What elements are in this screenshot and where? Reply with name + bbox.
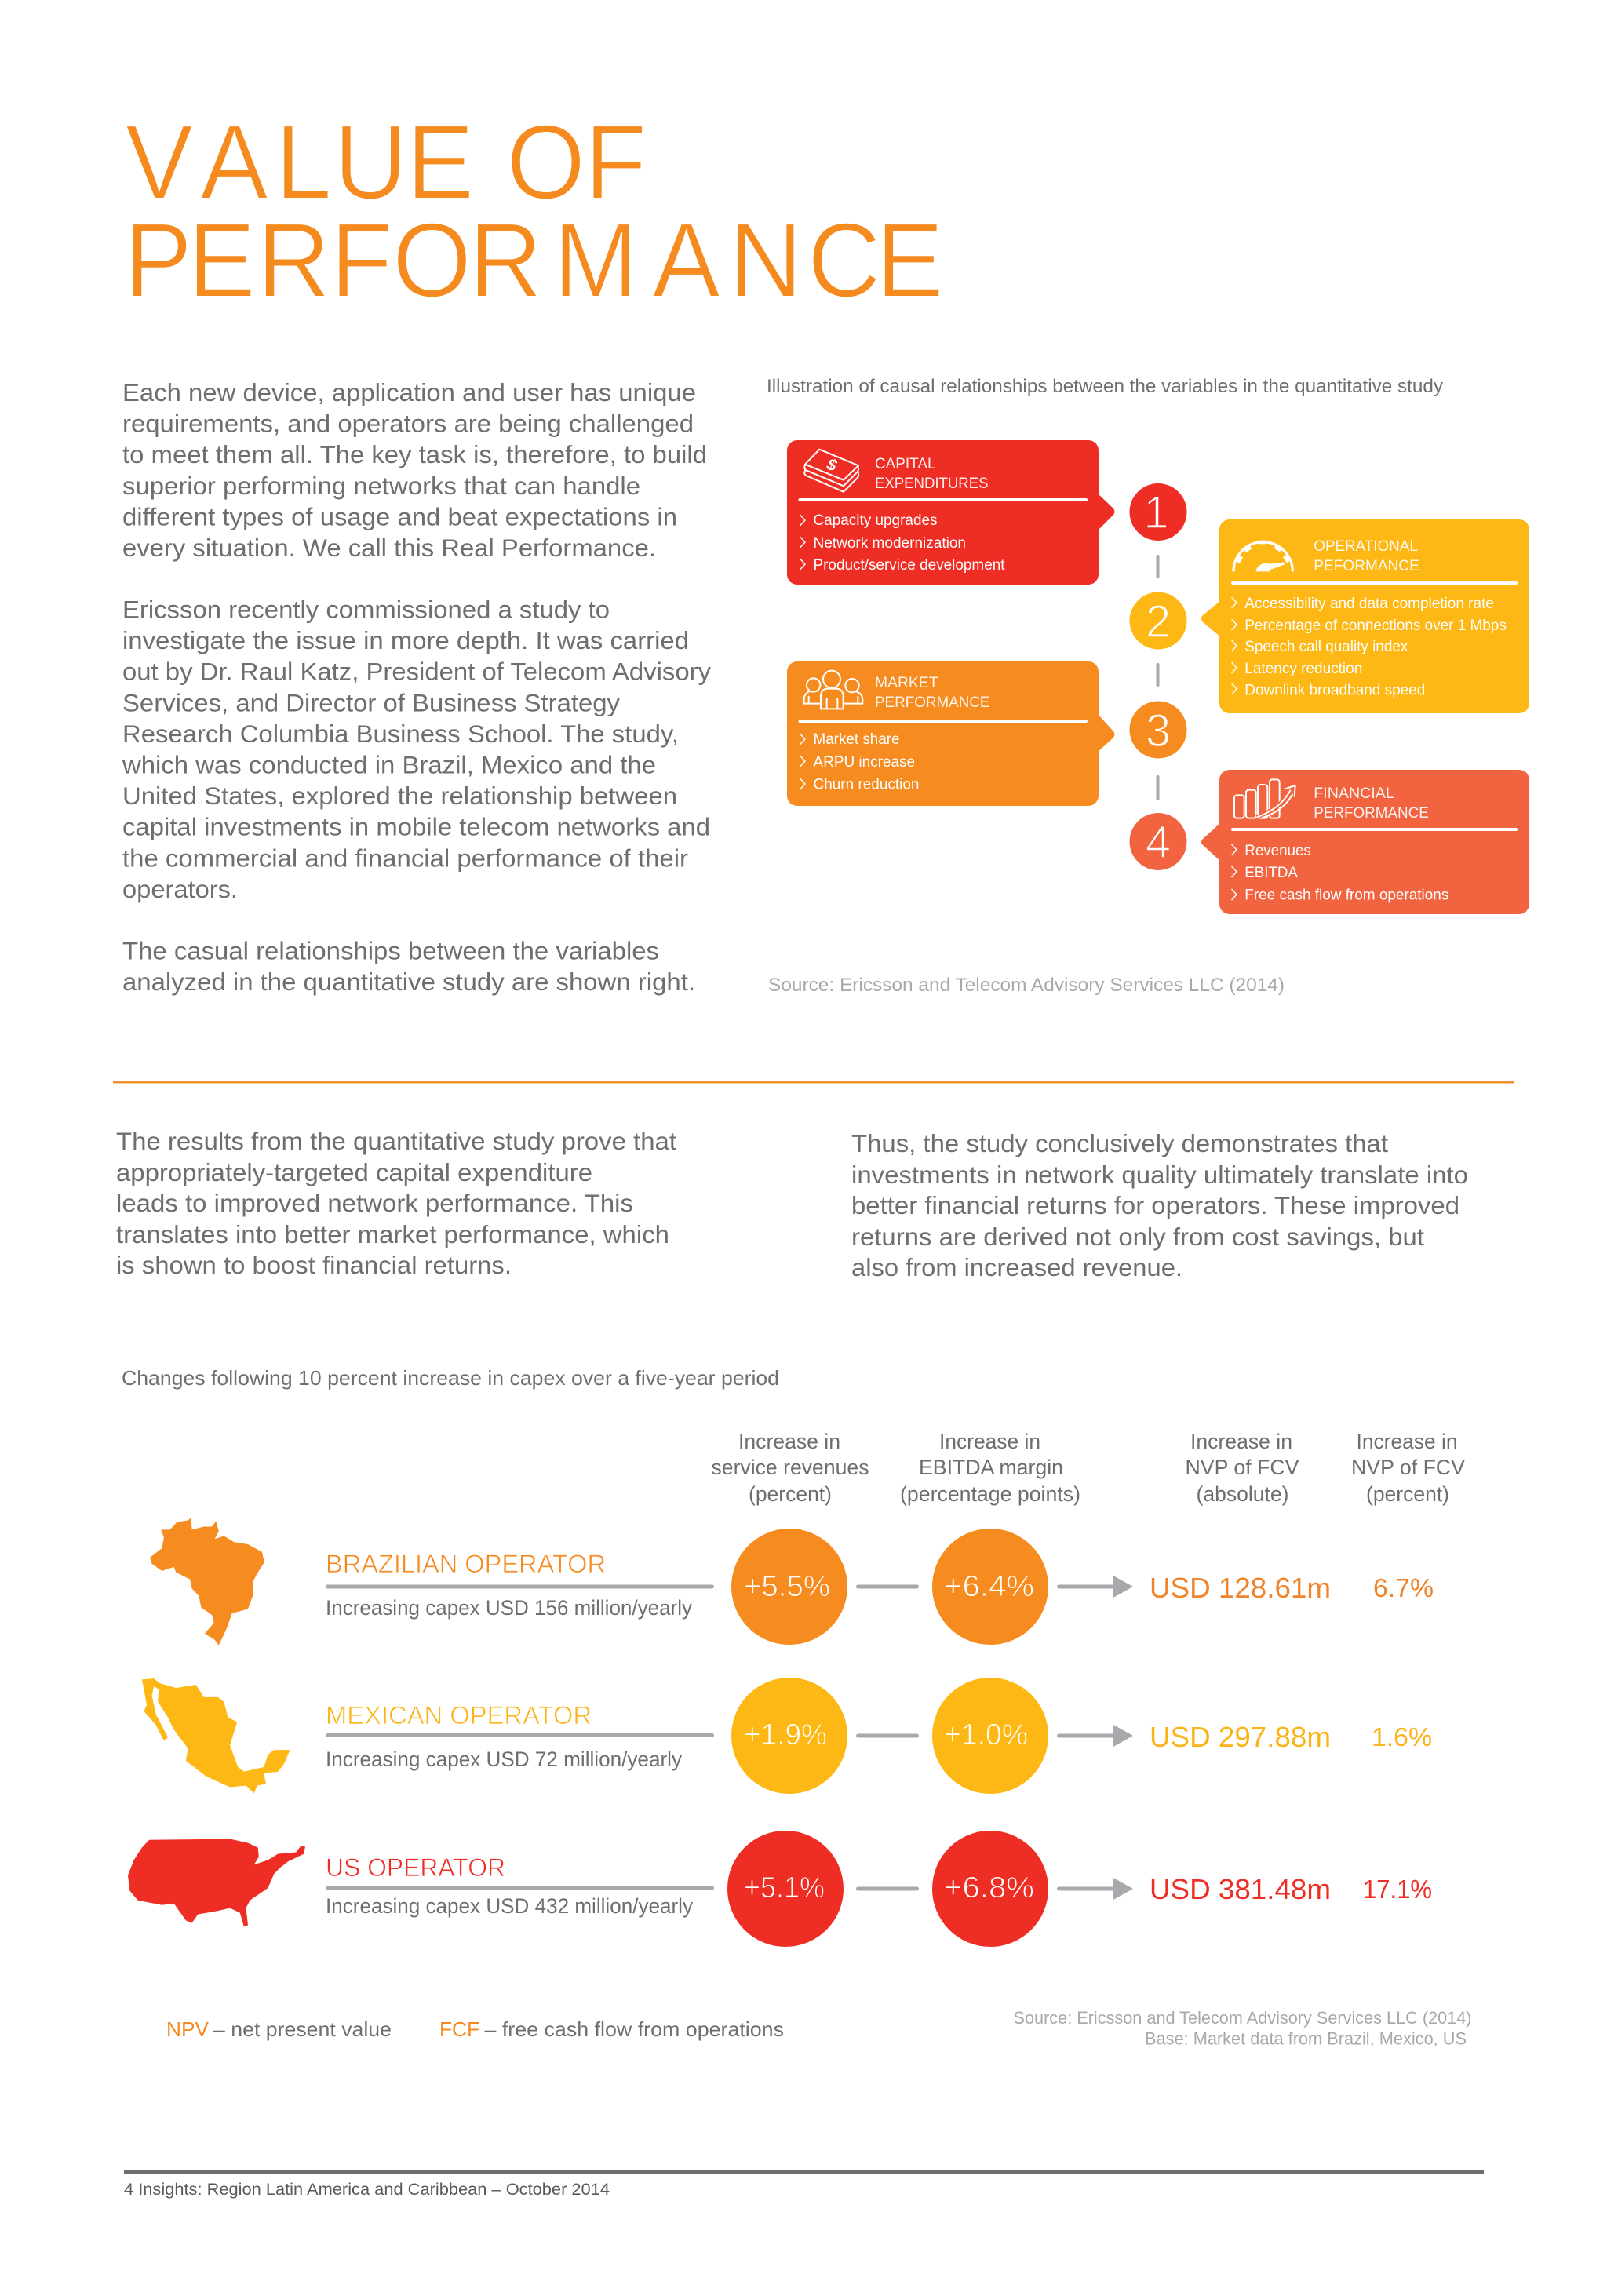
panel: financial performance: Free cash flow from operations	[1244, 887, 1448, 904]
panel: operational performance: OPERATIONAL	[1314, 538, 1418, 555]
column heading: service revenues: (percent)	[749, 1482, 832, 1506]
row: Brazilian operator: Increasing capex USD 156 million/yearly	[326, 1596, 693, 1620]
step 3 circle: 3	[1146, 705, 1171, 756]
row: US operator: 17.1%	[1363, 1875, 1432, 1904]
column heading: NVP absolute	[1185, 1430, 1299, 1506]
text block: intro: every situation. We call this Real Performance.	[122, 534, 656, 562]
panel: market performance	[787, 661, 1114, 806]
legend: abbreviations: NPV	[166, 2017, 210, 2041]
panel: capital expenditures: EXPENDITURES	[875, 475, 989, 492]
legend: abbreviations: – net present value	[213, 2017, 392, 2041]
map: Mexico	[142, 1678, 290, 1793]
panel: capital expenditures: Network modernization	[813, 535, 966, 552]
row: Mexican operator: MEXICAN OPERATOR	[326, 1701, 592, 1729]
column heading: service revenues: Increase in	[738, 1430, 840, 1453]
text block: intro: Research Columbia Business School. The study,	[122, 720, 679, 748]
text block: intro: Each new device, application and user has unique	[122, 378, 696, 406]
text block: results left: is shown to boost financial returns.	[116, 1251, 512, 1279]
text block: results left: appropriately-targeted capital expenditure	[116, 1158, 592, 1186]
text block: intro: to meet them all. The key task is, therefore, to build	[122, 440, 707, 468]
panel: capital expenditures	[787, 440, 1114, 585]
step 1 circle	[1130, 483, 1186, 541]
icon: money stack	[804, 450, 858, 492]
column heading: service revenues	[711, 1430, 869, 1506]
row: US operator: US OPERATOR	[326, 1853, 505, 1882]
text block: intro: Services, and Director of Business Strategy	[122, 688, 620, 716]
panel: market performance: Market share	[813, 731, 899, 748]
row: US operator: +6.8%	[944, 1871, 1034, 1904]
text block: intro: different types of usage and beat expectations in	[122, 502, 677, 530]
row: Brazilian operator	[326, 1529, 1434, 1645]
step 2 circle	[1130, 592, 1186, 650]
column heading: EBITDA margin: EBITDA margin	[919, 1456, 1063, 1479]
legend: abbreviations: – free cash flow from operations	[485, 2017, 784, 2041]
panel: market performance: PERFORMANCE	[875, 694, 990, 711]
text block: intro: superior performing networks that can handle	[122, 472, 640, 500]
row: US operator: +5.1%	[744, 1871, 825, 1904]
column heading: service revenues: service revenues	[711, 1456, 869, 1479]
title	[124, 104, 944, 320]
panel: financial performance: PERFORMANCE	[1314, 804, 1429, 822]
legend: abbreviations: FCF	[439, 2017, 479, 2041]
text block: intro: investigate the issue in more depth. It was carried	[122, 626, 689, 654]
column heading: NVP percent	[1351, 1430, 1465, 1506]
panel: operational performance: Speech call quality index	[1244, 639, 1408, 655]
row: Mexican operator	[326, 1678, 1432, 1794]
row: Mexican operator: USD 297.88m	[1150, 1721, 1331, 1753]
panel: operational performance: Accessibility and data completion rate	[1244, 596, 1494, 612]
source: table: Base: Market data from Brazil, Mexico, US	[1145, 2029, 1467, 2048]
step 4 circle: 4	[1146, 817, 1171, 868]
panel: capital expenditures: CAPITAL	[875, 455, 936, 472]
column heading: NVP percent: (percent)	[1366, 1482, 1449, 1506]
text block: intro: the commercial and financial performance of their	[122, 844, 688, 872]
row: US operator: Increasing capex USD 432 million/yearly	[326, 1894, 694, 1918]
text block: intro: out by Dr. Raul Katz, President of Telecom Advisory	[122, 658, 711, 686]
text block: results left: The results from the quantitative study prove that	[116, 1127, 676, 1155]
diagram caption: Illustration of causal relationships between the variables in the quantitative study	[767, 376, 1443, 397]
map: Brazil	[150, 1518, 264, 1645]
row: US operator: USD 381.48m	[1150, 1873, 1331, 1905]
column heading: NVP percent: Increase in	[1356, 1430, 1458, 1453]
arrow	[1057, 1725, 1133, 1747]
column heading: EBITDA margin: (percentage points)	[900, 1482, 1080, 1506]
column heading: EBITDA margin: Increase in	[939, 1430, 1040, 1453]
panel: capital expenditures: Capacity upgrades	[813, 512, 937, 529]
step 4 circle	[1130, 813, 1186, 870]
column heading: NVP absolute: Increase in	[1190, 1430, 1292, 1453]
legend: abbreviations	[166, 2017, 784, 2041]
column heading: NVP absolute: NVP of FCV	[1185, 1456, 1299, 1479]
arrow	[1057, 1877, 1133, 1901]
text block: results left: leads to improved network performance. This	[116, 1189, 633, 1217]
row: Mexican operator: +1.9%	[744, 1718, 827, 1751]
column heading: NVP percent: NVP of FCV	[1351, 1456, 1465, 1479]
row: Brazilian operator: +6.4%	[944, 1570, 1034, 1603]
text block: results left	[116, 1127, 676, 1279]
row: Brazilian operator: 6.7%	[1373, 1573, 1434, 1602]
footer: 4 Insights: Region Latin America and Caribbean – October 2014	[124, 2180, 610, 2199]
text block: results right: Thus, the study conclusively demonstrates that	[851, 1129, 1388, 1157]
panel: market performance: Churn reduction	[813, 777, 920, 793]
source: table: Source: Ericsson and Telecom Advisory Services LLC (2014)	[1014, 2008, 1472, 2028]
column heading: EBITDA margin	[900, 1430, 1080, 1506]
text block: intro	[122, 378, 711, 996]
panel: market performance: MARKET	[875, 674, 938, 691]
column heading: NVP absolute: (absolute)	[1196, 1482, 1288, 1506]
connector dashes	[1157, 555, 1160, 800]
icon: people group	[804, 671, 862, 709]
text block: intro: operators.	[122, 875, 238, 903]
row: Mexican operator: 1.6%	[1372, 1722, 1432, 1751]
row: Mexican operator: Increasing capex USD 72 million/yearly	[326, 1748, 683, 1771]
source: diagram: Source: Ericsson and Telecom Advisory Services LLC (2014)	[768, 975, 1285, 996]
panel: financial performance: FINANCIAL	[1314, 785, 1394, 802]
step 1 circle: 1	[1143, 487, 1169, 538]
arrow	[1057, 1576, 1133, 1598]
panel: operational performance: PEFORMANCE	[1314, 557, 1419, 574]
row: Brazilian operator: USD 128.61m	[1150, 1572, 1331, 1604]
title: VALUE OF	[126, 104, 647, 222]
icon: money stack: $	[824, 455, 839, 476]
table caption: Changes following 10 percent increase in capex over a five-year period	[122, 1366, 779, 1390]
row: Brazilian operator: +5.5%	[744, 1570, 830, 1603]
text block: intro: Ericsson recently commissioned a study to	[122, 595, 610, 623]
text block: intro: requirements, and operators are being challenged	[122, 410, 694, 438]
panel: capital expenditures: Product/service development	[813, 557, 1005, 574]
row: Brazilian operator: BRAZILIAN OPERATOR	[326, 1550, 606, 1578]
text block: results right: investments in network quality ultimately translate into	[851, 1161, 1468, 1189]
source: table	[1014, 2008, 1472, 2048]
icon: rising bar chart	[1234, 779, 1295, 818]
panel: operational performance: Latency reduction	[1244, 661, 1362, 677]
text block: intro: analyzed in the quantitative study are shown right.	[122, 968, 695, 996]
panel: operational performance: Percentage of connections over 1 Mbps	[1244, 618, 1507, 634]
text block: results right: also from increased revenue.	[851, 1253, 1182, 1281]
row: Mexican operator: +1.0%	[944, 1718, 1028, 1751]
row: US operator	[326, 1831, 1432, 1947]
text block: results right: better financial returns for operators. These improved	[851, 1191, 1459, 1219]
panel: financial performance: Revenues	[1244, 843, 1311, 859]
step 2 circle: 2	[1146, 596, 1171, 647]
text block: results right	[851, 1129, 1468, 1281]
panel: financial performance: EBITDA	[1244, 865, 1298, 881]
icon: speedometer	[1233, 541, 1292, 571]
text block: intro: The casual relationships between the variables	[122, 937, 659, 965]
step 3 circle	[1130, 702, 1186, 758]
text block: results right: returns are derived not only from cost savings, but	[851, 1223, 1424, 1251]
text block: intro: capital investments in mobile telecom networks and	[122, 813, 710, 841]
text block: intro: United States, explored the relationship between	[122, 782, 677, 810]
panel: financial performance	[1201, 770, 1529, 914]
panel: operational performance	[1201, 519, 1529, 713]
panel: operational performance: Downlink broadband speed	[1244, 683, 1425, 698]
text block: intro: which was conducted in Brazil, Mexico and the	[122, 750, 656, 778]
title: PERFORMANCE	[124, 202, 944, 320]
text block: results left: translates into better market performance, which	[116, 1220, 669, 1248]
map: United States	[128, 1839, 305, 1926]
panel: market performance: ARPU increase	[813, 754, 915, 771]
